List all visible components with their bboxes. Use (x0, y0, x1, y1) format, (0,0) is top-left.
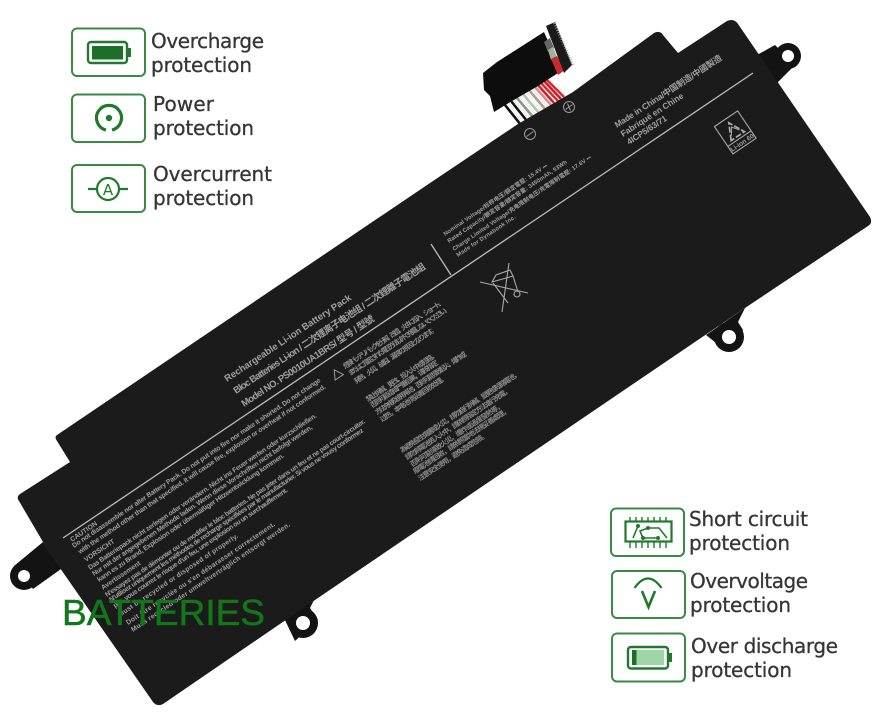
feature: overvoltage protection: protection (690, 593, 791, 617)
recycling mark (714, 111, 756, 154)
caution text: Muss recycled oder umweltverträglich entsorgt werden. (130, 522, 292, 634)
Japanese and Chinese warning text: 廢電池請回收，請依照當地法規妥善處理， (411, 405, 512, 477)
caution text: Das Batteriepack nicht zerlegen oder verändern. Nicht ins Feuer werfen oder kurzschließen. (87, 413, 318, 572)
product title text: Rechargeable Li-ion Battery Pack (223, 292, 354, 385)
caution text: Avertissement (100, 560, 143, 592)
icon: full battery (72, 28, 145, 76)
crossed-out bin mark (480, 263, 528, 312)
feature: overcharge protection (72, 28, 264, 77)
caution text (69, 377, 367, 634)
caution text: kann es zu Brand, Explosion oder übermäßiger Hitzeentwicklung kommen. (96, 453, 286, 584)
Japanese and Chinese warning text: またはご指定された電圧方法以外で充電しないでください。 (346, 303, 453, 379)
Japanese and Chinese warning text (341, 297, 522, 484)
feature: overvoltage protection (612, 569, 808, 618)
Japanese and Chinese warning text: 否則可能導致火災、爆炸或過度發熱等， (408, 400, 505, 470)
printed specification text: Made in China/中国制造/中國製造 (613, 52, 724, 130)
printed specification text: Nominal Voltage/标称电压/額定電壓: 15.4V ⎓ (442, 161, 549, 238)
Japanese and Chinese warning text: 危険 バッテリパックを分解、改造、火中に投入、ショート、 (341, 297, 447, 372)
icon: low battery (612, 634, 685, 682)
printed specification text: Made for Dynabook Inc. (456, 214, 517, 259)
Japanese and Chinese warning text: 方法充电及使用电池，否则可能导致起火、爆炸或 (373, 350, 469, 418)
Japanese and Chinese warning text: 禁止拆解、更改、投入火中或短路， (364, 350, 440, 405)
feature: over discharge protection: protection (691, 658, 792, 682)
printed specification text: 4ICP5/63/71 (625, 113, 669, 147)
icon: circuit board (611, 508, 684, 556)
recycling mark: Li-ion 60 (730, 133, 756, 154)
caution text: with the method other than that specified. It will cause fire, explosion or overheat if not conformed. (76, 384, 327, 556)
Japanese and Chinese warning text: 过热，本电池须妥善回收处理。 (378, 373, 450, 425)
Japanese and Chinese warning text: 注意安全使用，避免造成危險。 (416, 430, 490, 484)
feature: overcharge protection: protection (151, 53, 252, 77)
feature: power protection: protection (153, 116, 254, 140)
feature: overcurrent protection: protection (153, 186, 254, 210)
Japanese and Chinese warning text: 請勿將電池丟入火中，請依照指定方法進行充電， (403, 385, 513, 463)
feature: short circuit protection: protection (689, 531, 790, 555)
feature: over discharge protection (612, 634, 838, 682)
label: Overcurrent (153, 162, 272, 186)
label: Power (153, 92, 215, 116)
feature: power protection (72, 92, 254, 142)
flex cable and connector (483, 22, 573, 125)
mounting tabs (10, 43, 801, 641)
Japanese and Chinese warning text: 発熱、火災、破裂、漏液の原因となります。 (352, 324, 439, 387)
label: Short circuit (689, 507, 808, 531)
caution text: Do not disassemble nor alter Battery Pack. Do not put into fire nor make it shorted. Do not change (71, 377, 322, 550)
icon: voltage arc (612, 571, 685, 618)
product title text: Bloc Batteries Li-ion / 二次锂离子电池组 / 二次鋰離子電池組 (231, 260, 428, 397)
polarity marks (524, 102, 574, 140)
caution text: pas, vous courrez le risque d'un feu, une explosion ou un surchauffement. (112, 487, 289, 610)
icon: power ring (72, 94, 145, 142)
feature: short circuit protection (611, 507, 808, 556)
watermark: BATTERIES: BATTERIES (62, 592, 265, 633)
printed specification text: Charge Limited Voltage/充电限制电压/充電限制電壓: 17.6V ⎓ (451, 153, 593, 253)
Japanese and Chinese warning text: 否则可能造成严重后果，请按指定 (368, 358, 440, 411)
icon: ammeter (72, 165, 145, 212)
Japanese and Chinese warning text: 為避免發生傷害或火災，請勿自行拆解、變更或短路電池， (398, 369, 522, 456)
caution text: N'utilisez uniquement les méthodes de recharge spécifiées par le manufacturier. Si vous ne vousy conformez (108, 427, 365, 604)
caution text: CAUTION (69, 520, 99, 544)
product title text: Model NO. PS0010UA1BRS/ 型号 / 型號 (239, 313, 377, 410)
warning triangle (330, 367, 343, 380)
caution text: VORSICHT (83, 538, 117, 564)
label: Over discharge (691, 634, 838, 658)
caution text: Doit être recyclée ou s'en débarasser correctement. (125, 521, 277, 627)
caution text: Nur mit der angegebenen Methode laden. Wenn diese Vorschriften nicht befolgt werden, (91, 424, 314, 578)
label: Overvoltage (690, 569, 808, 593)
printed specification text: Fabriqué en Chine (619, 90, 686, 139)
divider lines (63, 73, 753, 538)
printed specification text: Rated Capacity/额定容量/額定容量: 3450mAh, 53Wh (446, 158, 569, 245)
printed specification text (442, 52, 724, 259)
label: Overcharge (151, 29, 264, 53)
caution text: N'essayez pas de démonter ou de modifier le bloc batteries. Ne pas jeter dans un feu et ne pas court-circuiter. (104, 418, 367, 599)
caution text: Must be recycled or disposed of properly. (117, 533, 240, 619)
icon: ammeter: A (103, 181, 114, 199)
feature: overcurrent protection (72, 162, 272, 212)
